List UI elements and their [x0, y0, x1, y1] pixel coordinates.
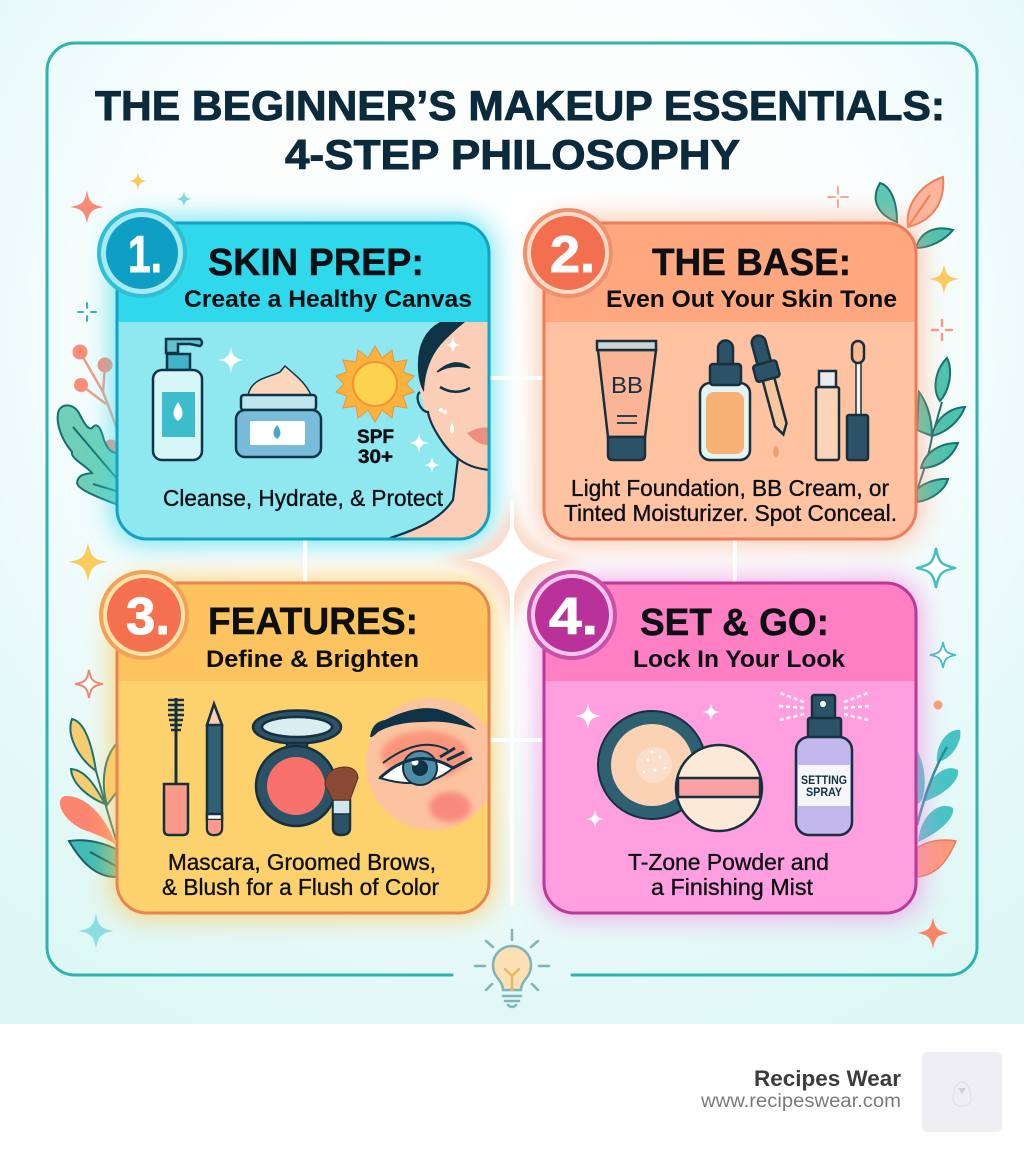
logo placeholder — [922, 1052, 1002, 1132]
heading: the base: Even Out Your Skin Tone — [606, 286, 897, 313]
heading: skin prep — [184, 242, 472, 313]
body text: features: & Blush for a Flush of Color — [162, 874, 439, 900]
body text: skin prep: Cleanse, Hydrate, & Protect — [163, 485, 444, 511]
body text: features — [162, 849, 439, 900]
icon: mascara — [164, 698, 188, 835]
badge 4 — [529, 572, 615, 658]
footer branding: Recipes Wear — [754, 1066, 901, 1091]
panel 2: the base — [525, 210, 916, 539]
body text: set and go — [628, 849, 829, 900]
icon: sun spf — [336, 346, 414, 468]
badge 1: 1. — [128, 226, 162, 284]
icon: bb tube: BB — [611, 372, 643, 398]
badge 2 — [525, 210, 611, 296]
icon: eye with brow and blush — [366, 698, 498, 830]
heading: features: FEATURES: — [208, 601, 418, 643]
icon: bb tube — [597, 341, 656, 460]
footer branding — [700, 1066, 901, 1112]
body text: the base: Light Foundation, BB Cream, or — [571, 475, 889, 501]
heading: features — [206, 601, 419, 673]
icon: powder compact — [598, 711, 706, 819]
badge 3 — [101, 572, 187, 658]
decorative sparkles — [68, 172, 959, 949]
icon: setting spray — [777, 693, 872, 835]
panel 1: skin prep — [99, 210, 495, 545]
footer branding: www.recipeswear.com — [700, 1091, 901, 1112]
right botanical decoration, lower — [917, 730, 960, 877]
icon: dropper bottle — [700, 333, 795, 460]
title: THE BEGINNER’S MAKEUP ESSENTIALS: — [95, 82, 945, 129]
icon: concealer — [816, 341, 868, 460]
heading: the base: THE BASE: — [652, 242, 851, 284]
icon: pump bottle — [153, 339, 202, 460]
heading: set and go: SET & GO: — [640, 602, 829, 644]
body text: the base — [564, 475, 897, 526]
body text: features: Mascara, Groomed Brows, — [168, 849, 436, 875]
badge 2: 2. — [550, 226, 595, 284]
heading: skin prep: Create a Healthy Canvas — [184, 286, 472, 313]
icon: blush compact with brush — [253, 710, 358, 835]
body text: set and go: T-Zone Powder and — [628, 849, 829, 875]
heading: the base — [606, 242, 897, 313]
panel glows — [112, 218, 921, 918]
title: 4-STEP PHILOSOPHY — [285, 131, 740, 178]
left botanical decoration, lower — [60, 719, 118, 877]
heading: set and go — [633, 602, 846, 673]
left botanical decoration, upper — [58, 344, 118, 505]
icon: face — [390, 322, 488, 538]
connector lines and center sparkle — [305, 378, 735, 905]
heading: features: Define & Brighten — [206, 646, 419, 673]
icon: cream jar — [236, 366, 321, 457]
body text: set and go: a Finishing Mist — [651, 874, 814, 900]
outer frame — [47, 43, 977, 975]
icon: lightbulb — [475, 930, 549, 1007]
panel 3: features — [101, 572, 498, 913]
icon: sun spf: 30+ — [358, 447, 393, 468]
panel 4: set and go — [529, 572, 916, 913]
icon: powder puff — [676, 745, 762, 831]
badge 3: 3. — [126, 588, 170, 646]
icon: pencil — [207, 704, 222, 835]
body text: the base: Tinted Moisturizer. Spot Conceal. — [564, 500, 897, 526]
heading: set and go: Lock In Your Look — [633, 646, 846, 673]
title — [95, 82, 945, 178]
right botanical decoration, upper — [876, 177, 965, 502]
icon: setting spray: SETTING — [801, 775, 847, 787]
badge 4: 4. — [549, 588, 598, 646]
badge 1 — [99, 210, 185, 296]
heading: skin prep: SKIN PREP: — [208, 242, 424, 284]
icon: setting spray: SPRAY — [806, 787, 842, 799]
icon: sun spf: SPF — [357, 427, 394, 448]
